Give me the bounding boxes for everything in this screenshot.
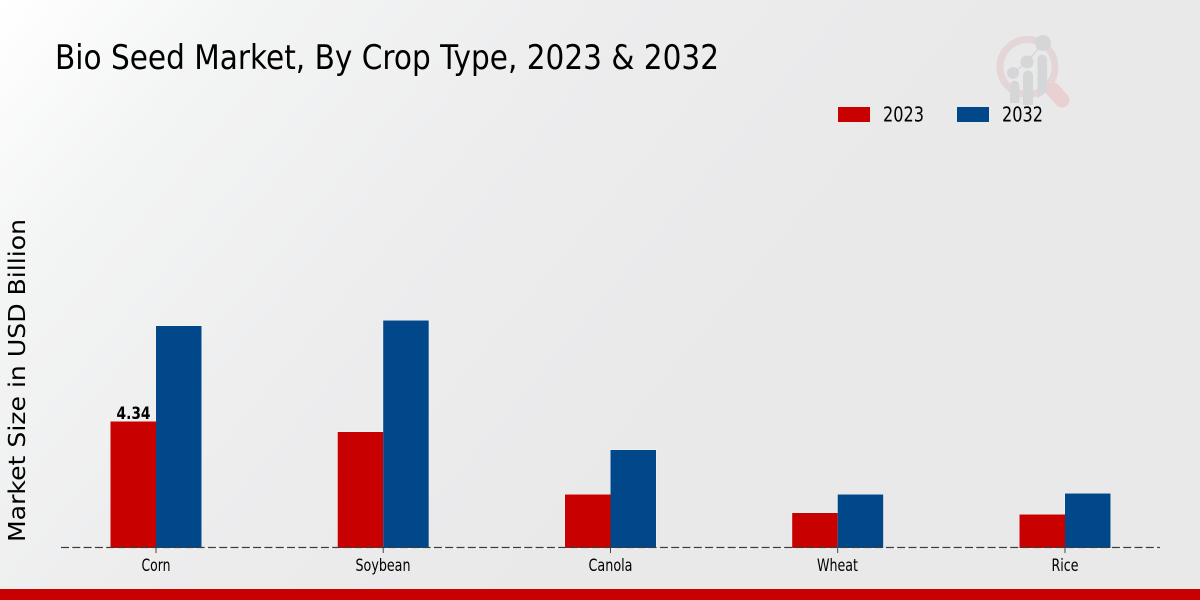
- x-axis category labels: Soybean: [356, 556, 410, 575]
- legend item: 2023: [838, 102, 924, 126]
- footer bar: [0, 589, 1200, 600]
- title: Bio Seed Market, By Crop Type, 2023 & 2032: [55, 38, 719, 78]
- data label: Corn 2023: 4.34: [116, 404, 151, 424]
- bars: Rice: [1019, 493, 1111, 548]
- legend item: 2023: 2023: [883, 102, 924, 126]
- x-axis category labels: Wheat: [817, 556, 858, 575]
- bars: Corn: [110, 326, 202, 548]
- x-axis category labels: [142, 556, 1078, 575]
- legend: [838, 102, 1043, 126]
- bars: Canola: [564, 450, 656, 548]
- icon: magnifier logo watermark: [1000, 35, 1062, 105]
- x-axis category labels: Canola: [588, 556, 632, 575]
- x-axis category labels: Rice: [1052, 556, 1078, 575]
- x-axis ticks: [156, 548, 1065, 553]
- x-axis baseline: [61, 548, 1160, 549]
- bars: Soybean: [337, 320, 429, 548]
- bars: Wheat: [792, 494, 884, 548]
- y-axis label: Market Size in USD Billion: [3, 219, 31, 542]
- legend item: 2032: 2032: [1002, 102, 1043, 126]
- bar chart: [61, 320, 1160, 575]
- x-axis category labels: Corn: [142, 556, 170, 575]
- legend item: 2032: [957, 102, 1043, 126]
